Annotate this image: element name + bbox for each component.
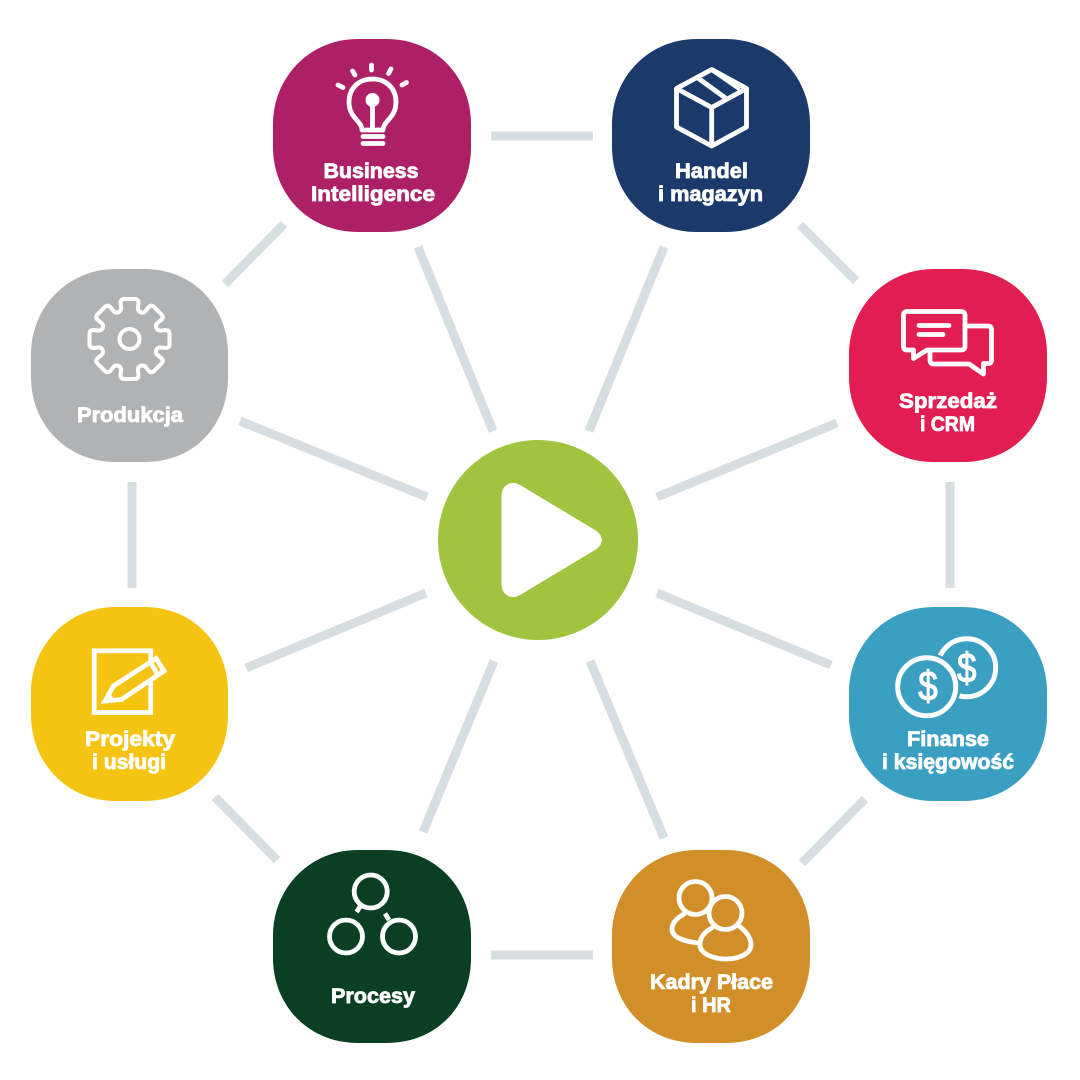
heading: Procesy	[331, 985, 415, 1008]
heading: Kadry Płace	[650, 971, 773, 994]
heading: i CRM	[920, 413, 975, 436]
icon: three circles	[330, 875, 416, 953]
panel: Finanse i księgowość	[849, 607, 1047, 801]
center play button	[438, 440, 638, 640]
heading: Business	[324, 160, 418, 183]
icon: coins: $	[957, 645, 976, 692]
heading: i usługi	[92, 751, 166, 774]
connector lines	[132, 136, 950, 955]
heading	[85, 728, 175, 774]
panel: Procesy	[273, 850, 471, 1043]
panel: Handel i magazyn	[612, 39, 810, 232]
icon: chat bubbles	[904, 312, 992, 374]
heading: Intelligence	[311, 183, 435, 206]
heading: i magazyn	[658, 183, 763, 206]
panel: Produkcja	[31, 269, 228, 462]
icon: box	[676, 70, 746, 146]
heading: Sprzedaż	[899, 390, 997, 413]
heading: Projekty	[85, 728, 175, 751]
heading: Handel	[675, 160, 748, 183]
icon: coins	[893, 639, 996, 721]
icon: light bulb	[338, 65, 406, 144]
icon: people	[672, 882, 751, 959]
heading: Finanse	[907, 728, 989, 751]
heading: i księgowość	[882, 751, 1014, 774]
heading: Produkcja	[77, 404, 183, 427]
heading	[311, 160, 435, 206]
icon: notepad and pencil	[94, 651, 164, 712]
icon: gear	[90, 299, 170, 379]
panel: Kadry Płace i HR	[612, 850, 810, 1043]
heading: i HR	[691, 994, 731, 1017]
panel: Projekty i usługi	[31, 607, 228, 801]
heading	[658, 160, 763, 206]
heading	[899, 390, 997, 436]
heading	[882, 728, 1014, 774]
panel: Sprzedaż i CRM	[849, 269, 1047, 462]
heading	[650, 971, 773, 1017]
panel: Business Intelligence	[273, 39, 471, 232]
icon: coins: $	[918, 663, 938, 710]
